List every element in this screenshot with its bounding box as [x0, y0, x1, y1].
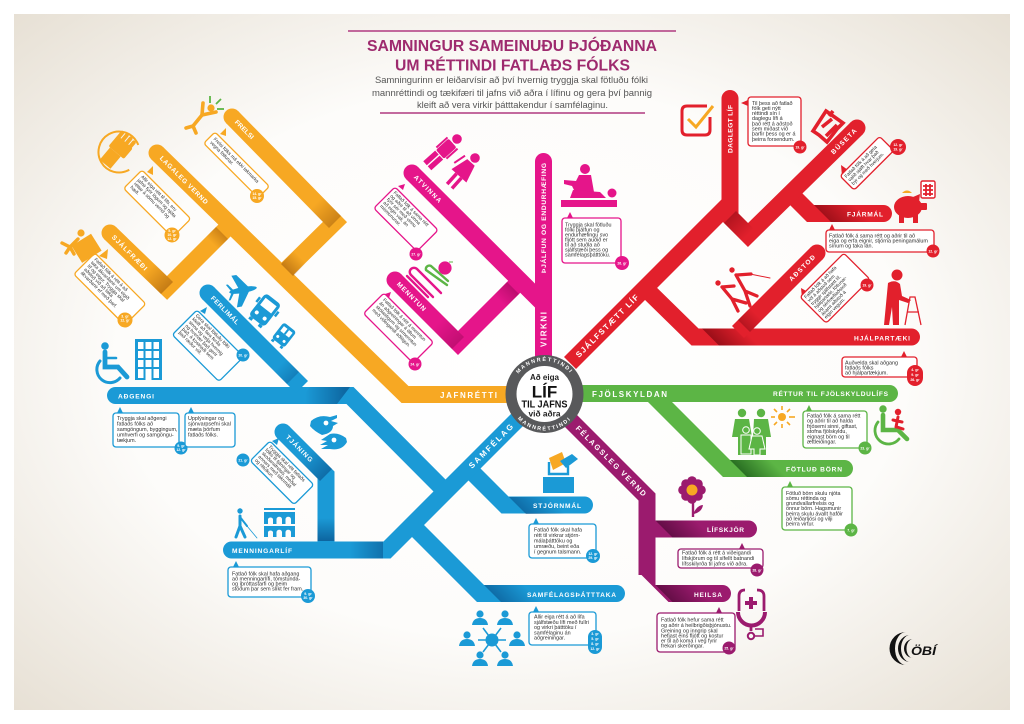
- callout: sjálfræði: ákvarðanir ef með þarf.: [79, 270, 119, 310]
- callout: heilsa: Greining og inngrip skal: [661, 628, 718, 634]
- callout: lífskjör: lífsskilyrða til jafns við aðra.: [682, 560, 748, 568]
- band labels: blue: MENNINGARLÍF: [232, 546, 292, 555]
- title: UM RÉTTINDI FATLAÐS FÓLKS: [395, 56, 630, 74]
- callout: tjáning: fólks til tjáningar og: [263, 448, 297, 481]
- callout: frelsi: 15. gr: [252, 196, 262, 200]
- center badge: TIL JAFNS: [522, 398, 568, 410]
- callout: aðgengi 1: tækjum.: [117, 438, 136, 444]
- callout: fötluð börn: sömu réttinda og: [786, 496, 826, 502]
- callout: hjálpartæki: að hjálpartækjum.: [845, 370, 888, 376]
- callout: þjálfun: fólki þjálfun og: [565, 228, 599, 234]
- callout: þjálfun: endurhæfingu svo: [565, 232, 608, 238]
- icon: sun: [771, 406, 795, 428]
- intro text: mannréttindi og tækifæri til jafns við aðra í lífinu og gera því þannig: [372, 87, 652, 98]
- callout: daglegt líf: réttindi sín í: [752, 111, 780, 117]
- icon: piggy bank: [894, 190, 927, 223]
- callout: samfélagsþátttaka: [529, 606, 602, 654]
- callout: heilsa: Fatlað fólk hefur sama rétt: [661, 616, 724, 624]
- band labels: yellow: JAFNRÉTTI: [440, 391, 497, 400]
- callout: menningarlíf: og íþróttastarfi og þeim: [232, 582, 288, 588]
- callout: menningarlíf: 30. gr: [303, 596, 313, 600]
- icon: wheelchair with child: [875, 405, 907, 444]
- callout: daglegt líf: sem miðast við: [752, 126, 788, 132]
- callout: fjármál: Fatlað fólk á sama rétt og aðrir til að: [829, 232, 915, 240]
- center badge: MANNRÉTTINDI: [516, 356, 572, 374]
- callout: heilsa: er til að koma í veg fyrir: [661, 638, 717, 644]
- callout: fötluð börn: að leiðarljósi og vilji: [786, 516, 832, 522]
- band labels: red: SJÁLFSTÆTT LÍF: [574, 293, 641, 359]
- callout: hjálpartæki: 4. gr: [911, 368, 919, 372]
- callout: daglegt líf: [741, 97, 806, 154]
- callout: heilsa: frekari skerðingar.: [661, 642, 704, 650]
- callout: heilsa: og aðrir á heilbrigðisþjónustu.: [661, 622, 731, 629]
- callout: þjálfun: fljótt sem auðið er: [565, 236, 608, 244]
- callout: hjálpartæki: 9. gr: [911, 373, 919, 377]
- callout: atvinna: 27. gr: [411, 252, 421, 256]
- icon: freedom figure: [186, 96, 224, 133]
- center badge: Að eiga: [530, 372, 559, 382]
- callout: ferlimál: sinna og velja hvernig: [187, 320, 224, 357]
- callout: tjáning: annars með táknmáli: [257, 454, 293, 490]
- callout: aðgengi 1: [113, 407, 188, 454]
- callout: lífskjör: [678, 543, 764, 576]
- center badge: MANNRÉTTINDI: [518, 416, 570, 430]
- band labels: red: HJÁLPARTÆKI: [854, 334, 910, 342]
- callout: fjármál: eiga og erfa eignir, stjórna peningamálum: [829, 238, 928, 244]
- callout: sjálfræði: 3. gr: [121, 314, 129, 318]
- callout: atvinna: og aðrir til að vinna: [388, 193, 422, 227]
- band labels: pink: MENNTUN: [395, 281, 427, 313]
- callout: samfélagsþátttaka: 3. gr: [591, 632, 599, 636]
- callout: sjálfræði: [74, 249, 146, 328]
- callout: sjálfræði: taka ákvarðanir um eigið: [89, 260, 131, 302]
- callout: hjálpartæki: 26. gr: [910, 378, 920, 382]
- callout: aðgengi 1: fatlaðs fólks að: [117, 420, 153, 428]
- callout: daglegt líf: Til þess að fatlað: [752, 100, 793, 107]
- band labels: pink: ÞJÁLFUN OG ENDURHÆFING: [539, 163, 548, 273]
- callout: aðstoð: völ á aðstoð sem: [806, 273, 836, 304]
- callout: búseta: býr og með hverjum.: [850, 151, 886, 187]
- callout: menningarlíf: 9. gr: [304, 592, 312, 596]
- band labels: blue: [118, 294, 616, 599]
- callout: lífskjör: 28. gr: [752, 568, 762, 572]
- callout: þjálfun: til að stuðla að: [565, 242, 600, 248]
- band labels: red: AÐSTOÐ: [788, 254, 817, 283]
- callout: samfélagsþátttaka: 12. gr: [590, 647, 600, 651]
- band labels: green: [592, 389, 889, 474]
- band labels: pink: ATVINNA: [412, 174, 443, 205]
- callout: aðstoð: [800, 253, 874, 323]
- band labels: yellow: FRELSI: [233, 119, 255, 141]
- callout: hjálpartæki: [842, 351, 923, 386]
- icon: bus: [244, 291, 284, 331]
- band labels: yellow: LAGALEG VERND: [158, 155, 209, 206]
- callout: samfélagsþátttaka: samfélaginu án: [534, 630, 571, 636]
- callout: réttur til fjölskyldulífs: 23. gr: [860, 446, 870, 450]
- callout: samfélagsþátttaka: aðgreiningar.: [534, 634, 565, 642]
- icon: people network: [459, 610, 525, 666]
- branch: purple FÉLAGSLEG VERND: [560, 410, 757, 602]
- callout: aðgengi 2: fatlaðs fólks.: [188, 432, 218, 438]
- icon: airplane: [224, 272, 260, 309]
- callout: atvinna: að eigin vali, án: [382, 200, 410, 228]
- callout: daglegt líf: það rétt á aðstoð: [752, 120, 792, 128]
- callout: fjármál: [826, 224, 940, 258]
- callout: ferlimál: það, á kostnaði sem: [180, 326, 216, 361]
- callout: aðgengi 1: 12. gr: [176, 448, 186, 452]
- callout: lagaleg vernd: réttar á sömu vernd og: [132, 181, 171, 220]
- callout: tjáning: [236, 438, 314, 505]
- callout: búseta: [840, 136, 906, 190]
- callout: ferlimál: það ræður við.: [177, 329, 204, 356]
- branch: red SJÁLFSTÆTT LÍF: [570, 90, 920, 363]
- callout: heilsa: 25. gr: [724, 646, 734, 650]
- callout: ferlimál: [172, 307, 250, 381]
- intro text: kleift að vera virkir þátttakendur í samfélaginu.: [417, 99, 608, 110]
- callout: búseta: Fatlað fólk á að geta: [843, 144, 879, 180]
- callout: fötluð börn: Fötluð börn skulu njóta: [786, 490, 841, 497]
- callout: tjáning: Tryggja skal rétt fatlaðs: [267, 443, 307, 484]
- callout: ferlimál: Gera skal fötluðu fólki: [194, 312, 231, 350]
- callout: hjálpartæki: fatlaðs fólks: [845, 364, 874, 372]
- band labels: blue: AÐGENGI: [118, 394, 154, 400]
- band labels: blue: FERLIMÁL: [209, 294, 241, 326]
- band labels: purple: LÍFSKJÖR: [707, 525, 744, 534]
- band labels: red: DAGLEGT LÍF: [725, 105, 734, 153]
- band labels: green: FÖTLUÐ BÖRN: [786, 464, 842, 474]
- icon: building: [135, 339, 162, 380]
- callout: fötluð börn: þeirra virtur.: [786, 522, 814, 528]
- band labels: purple: [574, 424, 744, 599]
- callout: samfélagsþátttaka: sjálfstæðu lífi með fullri: [534, 619, 589, 626]
- callout: lífskjör: lífskjörum og til sífellt batnandi: [682, 556, 754, 562]
- band labels: blue: SAMFÉLAGSÞÁTTTAKA: [527, 590, 616, 599]
- callout: þjálfun: [562, 212, 629, 270]
- icon: person with walker: [884, 270, 921, 325]
- intro text: Samningurinn er leiðarvísir að því hvernig tryggja skal fötluðu fólki: [375, 74, 648, 85]
- icon: self determination: [62, 229, 102, 263]
- callout: menntun: skólastigum og símenntun: [374, 304, 418, 348]
- callout: þjálfun: samfélagsþátttöku.: [565, 252, 610, 258]
- callout: samfélagsþátttaka: Allir eiga rétt á að lífa: [534, 614, 585, 620]
- callout: fjármál: 12. gr: [928, 250, 938, 254]
- callout: stjórnmál: Fatlað fólk skal hafa: [534, 526, 582, 534]
- logo: ÖBÍ: [890, 632, 938, 665]
- branch: pink VIRKNI: [386, 153, 552, 370]
- callout: ferlimál: kleift að fara ferða: [190, 316, 223, 348]
- callout: lagaleg vernd: 5. gr: [168, 229, 176, 233]
- callout: lagaleg vernd: Allir eiga rétt til lífs, eru: [139, 174, 178, 213]
- icon: signing hands: [310, 415, 347, 449]
- icon: house: [813, 111, 843, 142]
- icon: wheelchair accessibility: [97, 342, 127, 383]
- icon: family: [732, 409, 771, 455]
- icon: assisted walkers: [715, 267, 770, 311]
- callout: atvinna: Fatlað fólk á sama rétt: [392, 189, 431, 228]
- band labels: yellow: [110, 119, 497, 400]
- callout: stjórnmál: 12. gr: [588, 552, 598, 556]
- callout: aðgengi 1: samgöngum, byggingum,: [117, 427, 178, 433]
- callout: atvinna: mismununar.: [378, 204, 402, 227]
- callout: aðgengi 1: umhverfi og samgöngu-: [117, 432, 174, 438]
- icon: fist in circle: [91, 124, 147, 180]
- callout: þjálfun: sjálfstæði þess og: [565, 246, 608, 254]
- callout: aðstoð: tryggir sjálfstætt líf,: [810, 274, 843, 307]
- callout: daglegt líf: daglegu lífi á: [752, 116, 783, 122]
- callout: menningarlíf: að menningarlífi, tómstunda-: [232, 576, 301, 582]
- band labels: blue: TJÁNING: [284, 433, 315, 464]
- callout: stjórnmál: í gegnum talsmann.: [534, 550, 581, 556]
- callout: aðstoð: og sérfræðiaðstoð: [816, 281, 849, 314]
- callout: aðstoð: eigin vegum.: [823, 297, 847, 320]
- callout: stjórnmál: umræðu, beint eða: [534, 543, 579, 550]
- callout: menntun: Fatlað fólk á rétt á menntun: [381, 297, 428, 343]
- callout: daglegt líf: 19. gr: [795, 146, 805, 150]
- branch: green FJÖLSKYLDAN: [570, 385, 898, 477]
- callout: menningarlíf: [228, 561, 315, 603]
- callout: fötluð börn: önnur börn. Hagsmunir: [786, 506, 841, 512]
- callout: aðgengi 2: Upplýsingar og: [188, 416, 224, 422]
- icon: couple: [422, 129, 486, 193]
- callout: menntun: 24. gr: [410, 362, 420, 366]
- callout: tjáning: 21. gr: [238, 458, 248, 462]
- callout: menntun: með viðeigandi aðlögun.: [371, 307, 412, 349]
- callout: daglegt líf: þarfir þess og er á: [752, 132, 795, 138]
- callout: samfélagsþátttaka: 8. gr: [591, 642, 599, 646]
- callout: sjálfræði: aðstoð við að taka: [82, 266, 115, 299]
- callout: lagaleg vernd: hæfi.: [129, 185, 140, 197]
- callout: réttur til fjölskyldulífs: Fatlað fólk á sama rétt: [807, 412, 861, 420]
- callout: menntun: [363, 292, 433, 370]
- callout: lífskjör: Fatlað fólk á rétt á viðeigandi: [682, 550, 751, 556]
- callout: aðstoð: Fatlað fólk á að hafa: [802, 264, 838, 300]
- center badge: við aðra: [528, 408, 561, 418]
- callout: fötluð börn: [782, 481, 858, 536]
- band labels: pink: VIRKNI: [539, 312, 548, 347]
- callout: samfélagsþátttaka: og virkri þátttöku í: [534, 625, 577, 631]
- band labels: purple: HEILSA: [694, 592, 722, 599]
- band labels: green: RÉTTUR TIL FJÖLSKYLDULÍFS: [773, 389, 889, 398]
- callout: stjórnmál: málaþátttöku og: [534, 538, 572, 544]
- callout: frelsi: [204, 128, 269, 203]
- callout: sjálfræði: Fatlað fólk á rétt á að: [93, 256, 130, 293]
- callout: búseta: 19. gr: [893, 148, 903, 152]
- icon: massage therapy: [561, 164, 617, 207]
- callout: daglegt líf: fólk geti nýtt: [752, 106, 781, 112]
- callout: menningarlíf: Fatlað fólk skal hafa aðgang: [232, 570, 299, 578]
- callout: aðgengi 1: Tryggja skal aðgengi: [117, 415, 167, 422]
- callout: lagaleg vernd: jafnir fyrir lögum og njóta: [135, 177, 177, 219]
- band labels: purple: FÉLAGSLEG VERND: [574, 424, 648, 498]
- callout: fötluð börn: grundvallarfrelsis og: [786, 501, 834, 507]
- callout: menningarlíf: stöðum þar sem slíkt fer fram.: [232, 586, 303, 592]
- callout: aðgengi 2: sjónvarpsefni skal: [188, 422, 231, 428]
- branch: blue SAMFÉLAG: [107, 284, 625, 602]
- callout: stjórnmál: 29. gr: [588, 556, 598, 560]
- callout: lagaleg vernd: [124, 166, 191, 242]
- callout: ferlimál: 20. gr: [238, 354, 248, 358]
- callout: stjórnmál: rétt til virkrar stjórn-: [534, 533, 580, 539]
- icon: checkbox: [682, 106, 713, 135]
- icon: stethoscope: [738, 590, 765, 639]
- callout: frelsi: Frelsi fólks má ekki takmarka: [212, 137, 260, 185]
- band labels: yellow: SJÁLFRÆÐI: [110, 233, 150, 272]
- callout: þjálfun: Tryggja skal fötluðu: [565, 222, 612, 228]
- icon: books and apple: [407, 261, 453, 297]
- band labels: red: BÚSETA: [829, 126, 859, 156]
- callout: atvinna: fyrir sér með vinnu: [385, 196, 418, 229]
- callout: réttur til fjölskyldulífs: [803, 405, 872, 454]
- band labels: blue: SAMFÉLAG: [467, 422, 515, 470]
- callout: frelsi: 14. gr: [252, 192, 262, 196]
- callout: réttur til fjölskyldulífs: eignast börn og til: [807, 434, 850, 440]
- callout: lagaleg vernd: 12. gr: [167, 237, 177, 241]
- callout: réttur til fjölskyldulífs: og aðrir til að halda: [807, 418, 853, 424]
- callout: aðgengi 2: [185, 407, 235, 447]
- callout: fötluð börn: þeirra skulu ávallt hafðir: [786, 510, 843, 518]
- icon: calculator: [921, 181, 935, 198]
- icon: car: [270, 322, 296, 350]
- intro text: [372, 74, 652, 110]
- title: [367, 36, 657, 74]
- callout: réttur til fjölskyldulífs: frjósemi sinni, giftast,: [807, 424, 858, 430]
- callout: frelsi: vegna fötlunar.: [208, 140, 235, 167]
- callout: sjálfræði: 12. gr: [120, 318, 130, 322]
- callout: stjórnmál: [529, 518, 600, 563]
- callout: aðgengi 1: 9. gr: [177, 444, 185, 448]
- callout: fjármál: sínum og taka lán.: [829, 244, 873, 250]
- band labels: pink: [395, 163, 548, 347]
- callout: sjálfræði: líf og eigur. Tryggja skal: [86, 264, 126, 304]
- callout: ferlimál: og hvenær það gerir: [184, 323, 219, 358]
- callout: menntun: án aðgreiningar á öllum: [378, 300, 418, 340]
- callout: lagaleg vernd: 10. gr: [167, 233, 177, 237]
- center badge: [506, 355, 584, 433]
- callout: aðgengi 2: mæta þörfum: [188, 427, 221, 433]
- callout: réttur til fjölskyldulífs: stofna fjölskyldu,: [807, 429, 847, 435]
- icon: flower: [678, 476, 706, 517]
- callout: samfélagsþátttaka: 5. gr: [591, 637, 599, 641]
- callout: fötluð börn: 7. gr: [847, 528, 855, 532]
- band labels: green: FJÖLSKYLDAN: [592, 390, 667, 399]
- callout: aðstoð: hjálpartæki, fötlunar-: [813, 275, 849, 310]
- icon: ballot box: [543, 452, 578, 493]
- center badge: LÍF: [532, 382, 557, 402]
- callout: daglegt líf: þeirra forsendum.: [752, 137, 794, 143]
- callout: atvinna: [374, 184, 438, 260]
- icon: blind person with cane: [236, 508, 257, 538]
- callout: réttur til fjölskyldulífs: ættleiðingar.: [807, 438, 836, 446]
- callout: tjáning: skoðanafrelsis, meðal: [260, 450, 298, 488]
- band labels: blue: STJÓRNMÁL: [533, 501, 581, 510]
- callout: heilsa: hefjast eins fljótt og kostur: [661, 634, 724, 640]
- callout: hjálpartæki: Auðvelda skal aðgang: [845, 360, 898, 366]
- callout: þjálfun: 26. gr: [617, 262, 627, 266]
- callout: búseta: 12. gr: [893, 143, 903, 147]
- title: SAMNINGUR SAMEINUÐU ÞJÓÐANNA: [367, 36, 657, 55]
- callout: heilsa: [657, 607, 736, 654]
- icon: aqueduct: [264, 508, 295, 537]
- branch: yellow JAFNRÉTTI: [102, 108, 520, 394]
- band labels: red: [574, 105, 910, 359]
- band labels: red: FJÁRMÁL: [847, 210, 883, 218]
- callout: búseta: valið sjálft hvar það: [846, 149, 881, 183]
- logo: ÖBÍ: ÖBÍ: [911, 645, 938, 658]
- callout: tjáning: og rittúlkun.: [253, 458, 275, 480]
- title block: [348, 31, 676, 113]
- callout: aðstoð: ásamt aðstoð á: [819, 289, 848, 317]
- callout: aðstoð: 19. gr: [862, 284, 872, 288]
